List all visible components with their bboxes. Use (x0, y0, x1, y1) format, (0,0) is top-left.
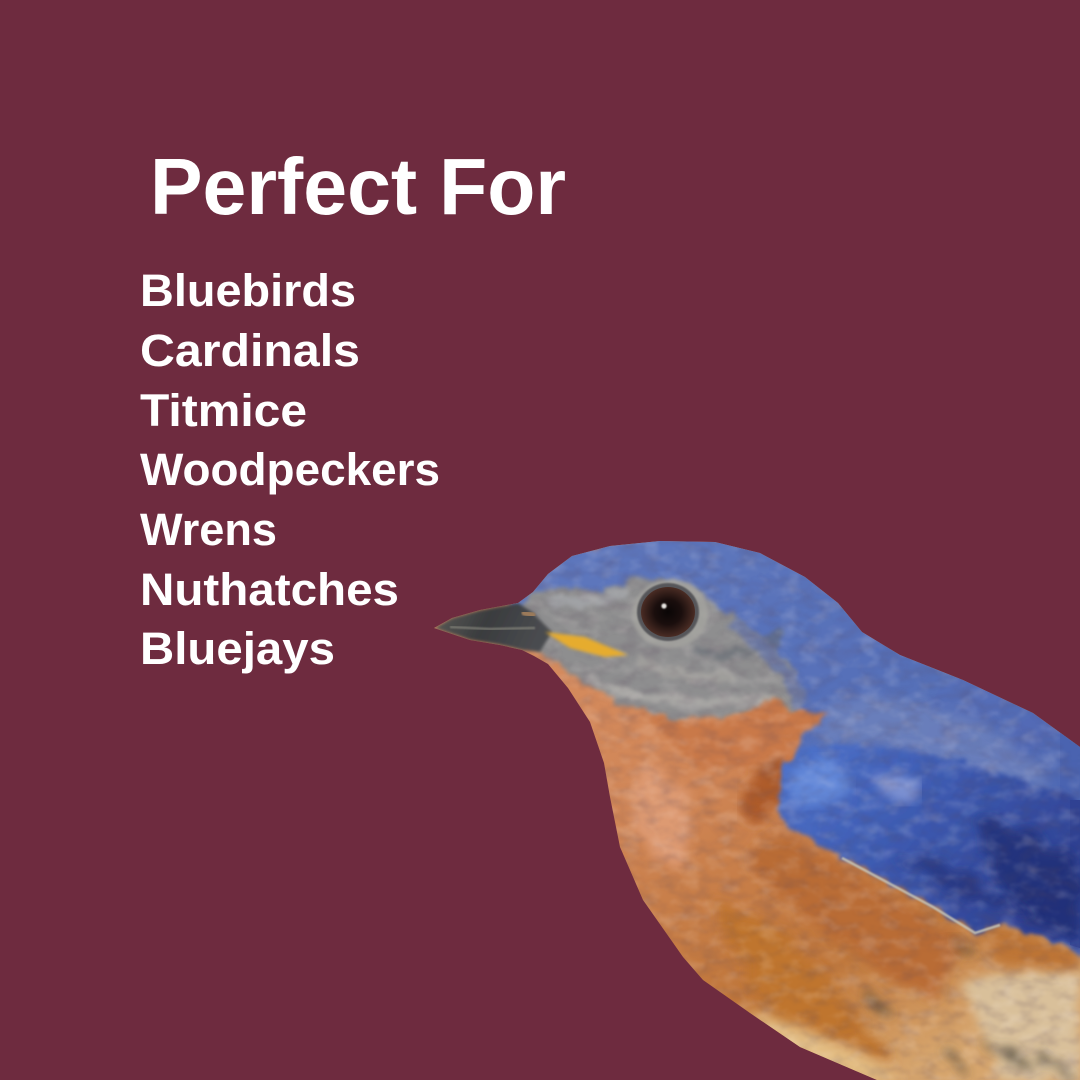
bird: blue head cap and back (510, 525, 1080, 955)
bird: feather texture (430, 540, 1080, 1080)
bird: wing (778, 745, 1080, 948)
bird species list (140, 265, 440, 674)
title: Perfect For (150, 142, 566, 231)
bird: orange throat patch (640, 697, 830, 770)
bird: yellow gape (545, 632, 628, 657)
bluebird illustration (430, 525, 1080, 1080)
list item: Woodpeckers: Woodpeckers (140, 444, 440, 495)
list item: Wrens: Wrens (140, 504, 277, 555)
bird: eye (632, 580, 708, 648)
bird: wing edge (842, 858, 1000, 933)
list item: Bluebirds: Bluebirds (140, 265, 356, 316)
list item: Cardinals: Cardinals (140, 325, 360, 376)
infographic canvas (140, 156, 1080, 1080)
list item: Titmice: Titmice (140, 385, 307, 436)
list item: Bluejays: Bluejays (140, 623, 335, 674)
bird: right edge blue fill (1060, 732, 1080, 800)
bird: grey face (522, 578, 808, 720)
list item: Nuthatches: Nuthatches (140, 564, 399, 615)
bird: breast and belly (430, 540, 1080, 1080)
bird: beak (434, 603, 552, 652)
bird: face shading (550, 592, 802, 702)
bird: pale shoulder (820, 696, 1048, 790)
